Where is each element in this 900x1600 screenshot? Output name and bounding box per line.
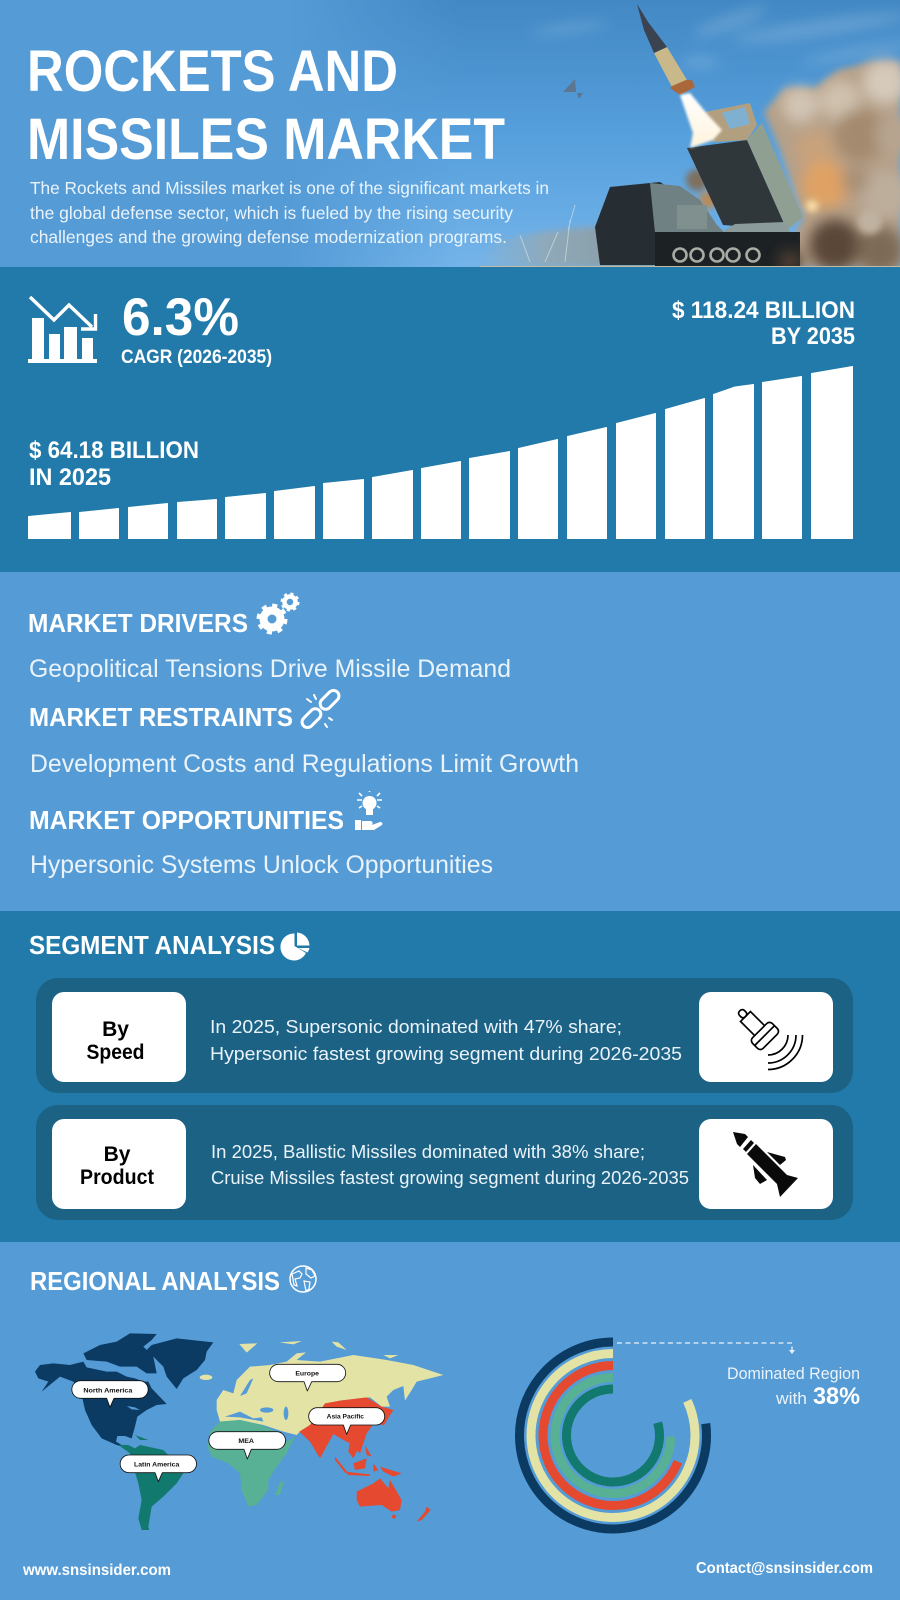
region: North America — [35, 1333, 213, 1448]
region: Asia Pacific — [299, 1397, 431, 1522]
launch photo illustration — [334, 0, 900, 267]
title — [27, 39, 505, 172]
heading: segment analysis: SEGMENT ANALYSIS — [29, 930, 275, 960]
region: Latin America — [118, 1435, 183, 1530]
world map: MEA — [238, 1438, 254, 1445]
region: Europe — [200, 1341, 443, 1435]
CAGR value: 6.3% — [122, 288, 239, 347]
smoke cloud — [764, 60, 900, 267]
world map: Latin America — [134, 1461, 180, 1468]
world map: Asia Pacific — [327, 1414, 364, 1421]
label: by speed: By — [102, 1018, 129, 1041]
2035 value: $ 118.24 BILLION — [672, 297, 855, 324]
dashed connector arrow — [617, 1343, 795, 1354]
product text: In 2025, Ballistic Missiles dominated with 38% share; — [211, 1141, 645, 1162]
callouts — [72, 1364, 385, 1482]
bar chart — [28, 366, 852, 538]
callout: dominated region: with — [775, 1389, 807, 1408]
icon: chart with declining arrow — [28, 297, 97, 363]
speed text — [210, 1016, 682, 1064]
hero panel — [0, 0, 900, 274]
world map: North America — [83, 1387, 133, 1394]
description: The Rockets and Missiles market is one of the significant markets in — [30, 178, 549, 198]
label: by product — [52, 1119, 186, 1209]
description — [30, 178, 549, 247]
label: by speed — [52, 992, 186, 1082]
driver text: Geopolitical Tensions Drive Missile Demand — [29, 655, 511, 683]
world map: Europe — [295, 1371, 319, 1378]
panel: market size — [0, 267, 900, 572]
heading: market restraints: MARKET RESTRAINTS — [29, 702, 293, 732]
opportunity text: Hypersonic Systems Unlock Opportunities — [30, 851, 493, 879]
row: by product — [36, 1105, 853, 1220]
heading: regional analysis: REGIONAL ANALYSIS — [30, 1266, 280, 1296]
2035 value: BY 2035 — [771, 323, 855, 350]
title: MISSILES MARKET — [27, 107, 505, 172]
icon: pie chart — [280, 932, 310, 960]
callout: dominated region: 38% — [813, 1383, 860, 1410]
callout: dominated region: Dominated Region — [727, 1364, 860, 1383]
2035 value — [672, 297, 855, 350]
icon box: missile — [699, 1119, 833, 1209]
row: by speed — [36, 978, 853, 1093]
callout: dominated region — [727, 1364, 860, 1410]
panel: segment analysis — [0, 911, 900, 1242]
inland seas — [225, 1378, 288, 1422]
product text: Cruise Missiles fastest growing segment during 2026-2035 — [211, 1167, 689, 1188]
product text — [211, 1141, 689, 1188]
label: by product: By — [104, 1143, 131, 1166]
great lakes — [88, 1361, 140, 1410]
footer: contact: Contact@snsinsider.com — [696, 1560, 873, 1577]
restraint text: Development Costs and Regulations Limit Growth — [30, 750, 579, 778]
panel: regional analysis — [30, 1266, 860, 1530]
description: the global defense sector, which is fueled by the rising security — [30, 203, 513, 223]
icon: gears — [258, 594, 298, 632]
speed text: In 2025, Supersonic dominated with 47% share; — [210, 1016, 622, 1037]
icon: globe — [290, 1266, 316, 1292]
speed text: Hypersonic fastest growing segment during 2026-2035 — [210, 1043, 682, 1064]
CAGR value: CAGR (2026-2035) — [121, 347, 272, 368]
icon: broken chain — [300, 688, 341, 730]
region: MEA — [207, 1420, 295, 1507]
heading: market drivers: MARKET DRIVERS — [28, 608, 248, 638]
footer: website: www.snsinsider.com — [22, 1562, 171, 1579]
world map — [35, 1333, 443, 1530]
2025 value: $ 64.18 BILLION — [29, 437, 199, 464]
rocket exhaust flame — [680, 93, 722, 148]
panel: market dynamics — [28, 594, 579, 879]
title: ROCKETS AND — [27, 39, 398, 104]
icon box: sensor — [699, 992, 833, 1082]
radial bar chart — [519, 1342, 706, 1529]
CAGR value — [121, 288, 272, 368]
icon: lightbulb in hand — [355, 791, 382, 830]
heading: market opportunities: MARKET OPPORTUNITIES — [29, 805, 344, 835]
2025 value: IN 2025 — [29, 464, 111, 491]
2025 value — [29, 437, 199, 491]
foreground dust — [778, 219, 900, 274]
label: by product: Product — [80, 1166, 154, 1189]
label: by speed: Speed — [86, 1041, 144, 1064]
description: challenges and the growing defense modernization programs. — [30, 227, 507, 247]
